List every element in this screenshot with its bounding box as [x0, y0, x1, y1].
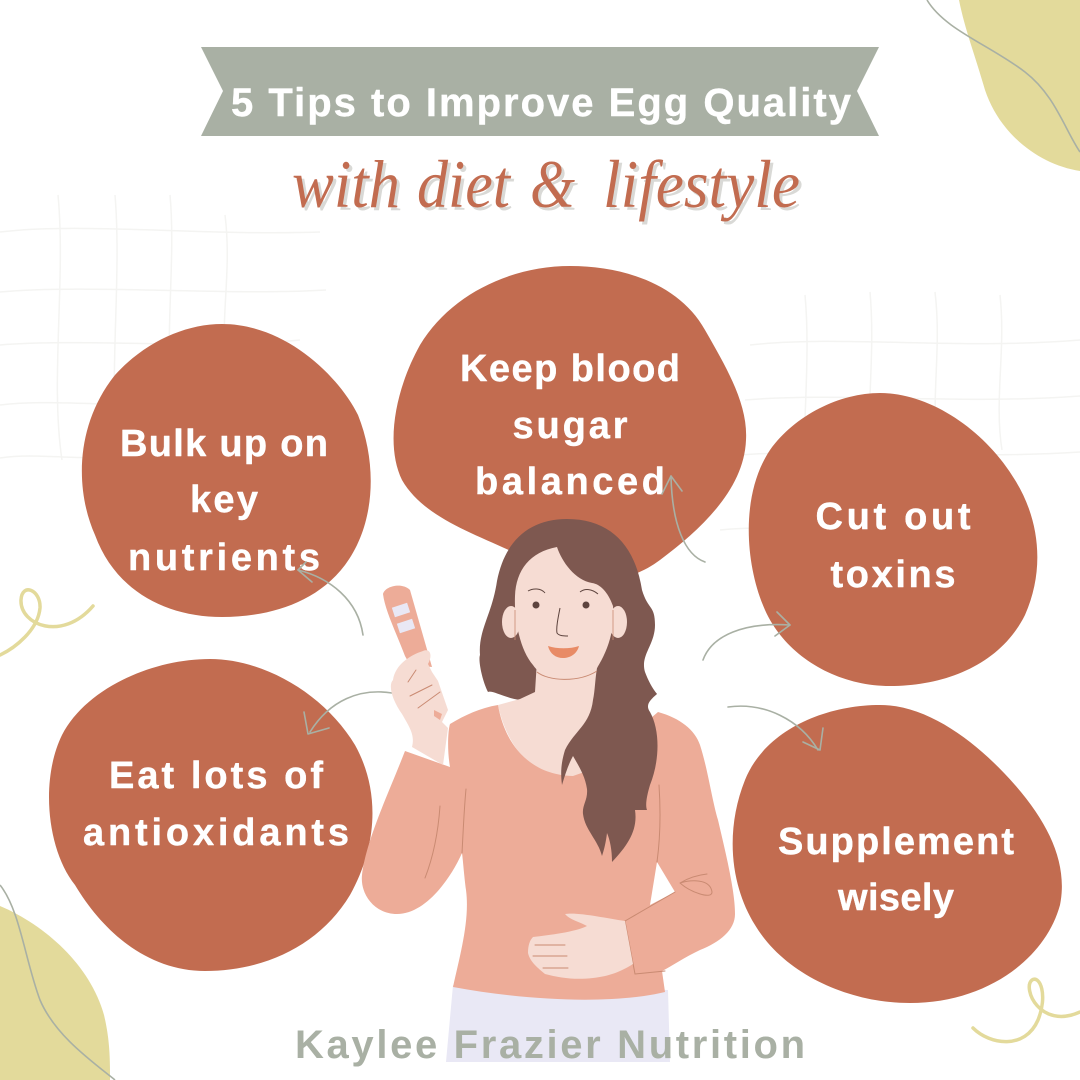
subtitle: with	[292, 146, 400, 222]
neck and chest	[498, 660, 600, 780]
raised hand	[383, 586, 448, 765]
hair back	[479, 519, 657, 700]
subtitle: &	[530, 146, 575, 222]
subtitle: lifestyle	[606, 149, 803, 225]
squiggle: bottom right	[973, 979, 1080, 1042]
panel: bulk up on key nutrients: Bulk up on	[120, 423, 328, 465]
face	[502, 547, 627, 681]
arrow: to toxins	[703, 612, 790, 660]
title text: 5 Tips to Improve Egg Quality	[231, 81, 852, 125]
title banner	[201, 47, 879, 136]
panel: eat lots of antioxidants	[49, 659, 372, 971]
shirt	[362, 705, 735, 1000]
panel: keep blood sugar balanced: balanced	[475, 461, 665, 503]
lower hand	[528, 914, 633, 979]
decorative blob: top right	[927, 0, 1080, 171]
subtitle	[292, 146, 803, 225]
panel: keep blood sugar balanced: Keep blood	[460, 348, 680, 390]
arrow: to antioxidants	[304, 692, 392, 734]
brand footer: Kaylee Frazier Nutrition	[295, 1023, 805, 1067]
subtitle: lifestyle	[603, 146, 800, 222]
panel: supplement wisely: Supplement	[778, 821, 1014, 863]
arrow: to blood sugar	[662, 476, 705, 562]
panel: supplement wisely	[733, 705, 1062, 1003]
subtitle: diet	[420, 149, 515, 225]
subtitle: diet	[417, 146, 512, 222]
panel: cut out toxins: Cut out	[816, 496, 971, 538]
panel: bulk up on key nutrients: key	[190, 479, 258, 521]
test strip	[383, 586, 432, 667]
illustration: woman holding test	[362, 519, 735, 1062]
decorative blob: bottom left	[0, 885, 115, 1080]
arrow: to nutrients	[298, 562, 363, 635]
panel: supplement wisely: wisely	[837, 877, 954, 919]
sleeve lines	[425, 785, 712, 974]
panel: bulk up on key nutrients	[82, 324, 371, 617]
white gap under elbow	[650, 862, 675, 905]
panel: cut out toxins: toxins	[830, 554, 956, 596]
arrow: to supplements	[728, 706, 823, 750]
subtitle: &	[533, 149, 578, 225]
subtitle: with	[295, 149, 403, 225]
squiggle: left	[0, 590, 93, 655]
panel: eat lots of antioxidants: Eat lots of	[109, 755, 323, 797]
pants	[446, 985, 670, 1062]
panel: bulk up on key nutrients: nutrients	[128, 537, 320, 579]
panel: eat lots of antioxidants: antioxidants	[83, 812, 349, 854]
hair front lock	[561, 660, 658, 862]
panel: keep blood sugar balanced	[394, 266, 746, 581]
panel: cut out toxins	[749, 393, 1037, 686]
panel: keep blood sugar balanced: sugar	[512, 405, 628, 447]
